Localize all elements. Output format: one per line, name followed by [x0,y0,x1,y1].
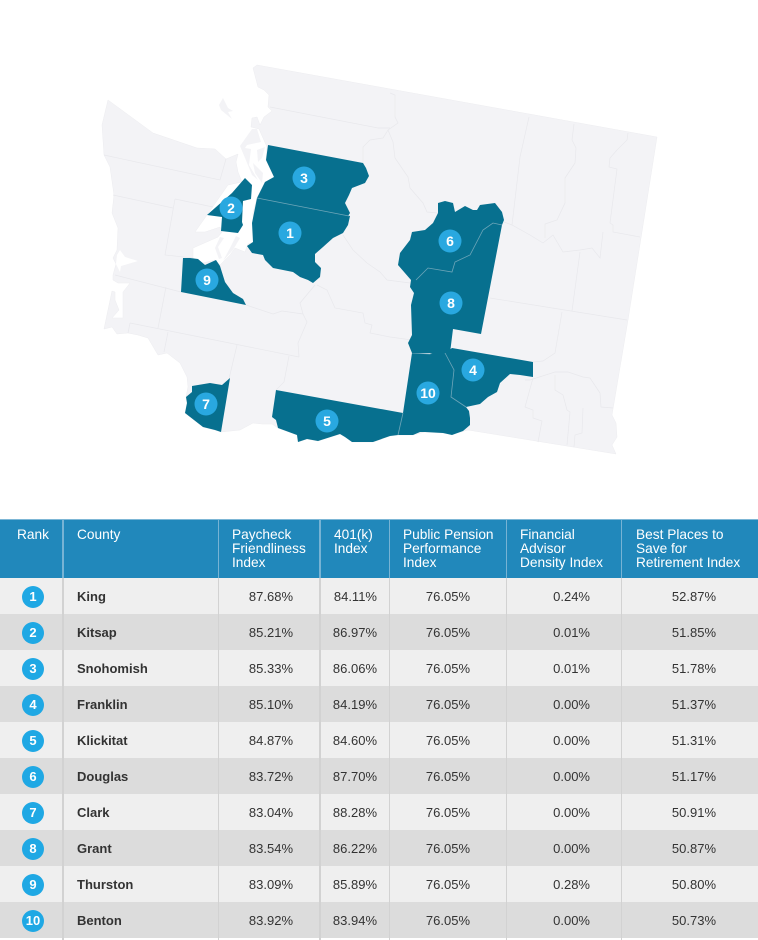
row 5: Klickitat: 0.00% [553,733,590,748]
row 8: Grant: 76.05% [426,841,470,856]
row 5: Klickitat: 51.31% [672,733,716,748]
table header: Friendliness [232,541,306,556]
row 5: Klickitat: 84.60% [333,733,377,748]
map marker 10 [416,382,440,404]
row 6: Douglas: Douglas [77,769,128,784]
county: Klickitat [272,390,403,442]
row 9: Thurston: 50.80% [672,877,716,892]
row 2: Kitsap: 2 [29,625,37,640]
table header: Performance [403,541,481,556]
row 3: Snohomish: 86.06% [333,661,377,676]
row 10: Benton: 10 [26,913,40,928]
row 9: Thurston: 83.09% [249,877,293,892]
map marker 5 [316,410,338,432]
row 6: Douglas: 76.05% [426,769,470,784]
county: Kitsap [207,178,252,233]
map marker 8: 8 [447,295,455,311]
county line: Benton and Klickitat [398,413,403,435]
row 9: Thurston: 9 [29,877,37,892]
table: county rankings [0,519,758,940]
table header: Rank [17,527,49,542]
state outline [102,65,657,454]
row 3: Snohomish: 85.33% [249,661,293,676]
row 4: Franklin [0,686,758,722]
row 7: Clark: 50.91% [672,805,716,820]
row 8: Grant: 8 [29,841,37,856]
row 4: Franklin: 0.00% [553,697,590,712]
row 10: Benton: Benton [77,913,122,928]
row 1: King: 1 [29,589,37,604]
row 4: Franklin: 51.37% [672,697,716,712]
row 10: Benton: 83.92% [249,913,293,928]
map marker 7 [194,392,218,416]
row 10: Benton: 0.00% [553,913,590,928]
county: Snohomish [257,145,369,216]
row 7: Clark: 76.05% [426,805,470,820]
map marker 6 [438,230,462,252]
row 2: Kitsap [0,614,758,650]
map: Washington counties [102,65,657,454]
county: Douglas and Grant [398,201,504,353]
row 10: Benton: 50.73% [672,913,716,928]
row 8: Grant: 83.54% [249,841,293,856]
row 4: Franklin: Franklin [77,697,128,712]
row 10: Benton [0,902,758,938]
row 6: Douglas: 51.17% [672,769,716,784]
row 2: Kitsap: Kitsap [77,625,117,640]
county lines: Benton, Franklin and Klickitat [412,347,466,407]
row 3: Snohomish: 0.01% [553,661,590,676]
row 1: King [0,578,758,614]
table header: Public Pension [403,527,494,542]
row 9: Thurston [0,866,758,902]
row 9: Thurston: 76.05% [426,877,470,892]
row 7: Clark: 88.28% [333,805,377,820]
row 9: Thurston: 0.28% [553,877,590,892]
county line: Douglas and Grant [416,223,502,280]
row 6: Douglas: 6 [29,769,37,784]
row 2: Kitsap: 85.21% [249,625,293,640]
row 1: King: 52.87% [672,589,716,604]
row 8: Grant: 50.87% [672,841,716,856]
table header: Index [232,555,265,570]
map marker 4 [462,358,484,382]
row 4: Franklin: 85.10% [249,697,293,712]
table header: Retirement Index [636,555,740,570]
table header: Paycheck [232,527,291,542]
row 8: Grant: 0.00% [553,841,590,856]
row 6: Douglas: 0.00% [553,769,590,784]
map marker 1 [278,222,302,244]
row 8: Grant: 86.22% [333,841,377,856]
county: Thurston [181,258,246,305]
map marker 10: 10 [420,385,436,401]
row 10: Benton: 83.94% [333,913,377,928]
row 1: King: 87.68% [249,589,293,604]
county: Clark [185,378,230,432]
map marker 9 [196,268,218,292]
table header [0,519,758,578]
county boundary lines [104,93,640,447]
row 1: King: 76.05% [426,589,470,604]
table header: 401(k) [334,527,373,542]
row 3: Snohomish: 51.78% [672,661,716,676]
row 4: Franklin: 76.05% [426,697,470,712]
row 1: King: 0.24% [553,589,590,604]
map marker 1: 1 [286,225,294,241]
row 2: Kitsap: 76.05% [426,625,470,640]
map marker 4: 4 [469,362,477,378]
row 6: Douglas: 83.72% [249,769,293,784]
row 5: Klickitat: 5 [29,733,37,748]
row 4: Franklin: 84.19% [333,697,377,712]
row 6: Douglas: 87.70% [333,769,377,784]
map marker 2 [220,196,242,220]
row 2: Kitsap: 51.85% [672,625,716,640]
table header: County [77,527,120,542]
row 1: King: King [77,589,106,604]
county: Benton [398,347,470,435]
row 1: King: 84.11% [334,589,377,604]
row 7: Clark [0,794,758,830]
row 5: Klickitat: Klickitat [77,733,128,748]
table header: Advisor [520,541,566,556]
county: King [247,198,350,283]
table header: Density Index [520,555,603,570]
row 3: Snohomish: 76.05% [426,661,470,676]
row 3: Snohomish [0,650,758,686]
map marker 8 [440,292,462,314]
row 7: Clark: 0.00% [553,805,590,820]
water inlet: Grays Harbor [116,250,138,272]
row 9: Thurston: 85.89% [333,877,377,892]
row 6: Douglas [0,758,758,794]
islands: San Juan, Whidbey, Camano and south sound [215,98,265,261]
row 7: Clark: 7 [29,805,37,820]
row 4: Franklin: 4 [29,697,37,712]
map marker 7: 7 [202,396,210,412]
row 3: Snohomish: Snohomish [77,661,148,676]
table header: Index [403,555,436,570]
row 2: Kitsap: 0.01% [553,625,590,640]
row 5: Klickitat: 84.87% [249,733,293,748]
map marker 2: 2 [227,200,235,216]
row 8: Grant: Grant [77,841,112,856]
map marker 6: 6 [446,233,454,249]
map marker 9: 9 [203,272,211,288]
table header: Financial [520,527,575,542]
county line: King and Snohomish [257,198,349,216]
county: Franklin [445,348,533,407]
row 5: Klickitat [0,722,758,758]
row 10: Benton: 76.05% [426,913,470,928]
row 5: Klickitat: 76.05% [426,733,470,748]
row 9: Thurston: Thurston [77,877,133,892]
map marker 3: 3 [300,170,308,186]
map marker 5: 5 [323,413,331,429]
map marker 3 [292,166,316,190]
row 3: Snohomish: 3 [29,661,37,676]
row 8: Grant [0,830,758,866]
table header: Save for [636,541,687,556]
table header: Index [334,541,367,556]
row 2: Kitsap: 86.97% [333,625,377,640]
row 7: Clark: Clark [77,805,110,820]
row 7: Clark: 83.04% [249,805,293,820]
table header: Best Places to [636,527,724,542]
